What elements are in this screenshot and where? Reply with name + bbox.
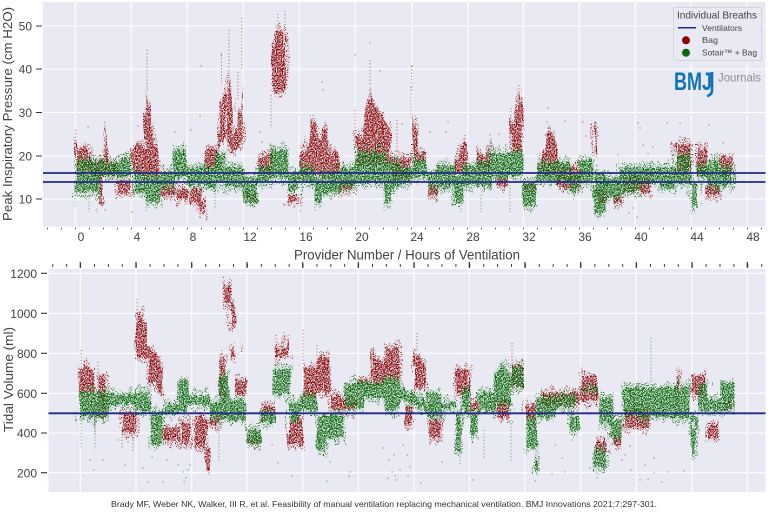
scatter: bag, volume — [80, 279, 732, 481]
panel: peak inspiratory pressure chart — [0, 2, 766, 244]
y axis tick labels — [19, 20, 32, 206]
x axis tick labels: 32 — [522, 230, 536, 244]
x axis tick labels: 20 — [355, 230, 369, 244]
legend — [674, 8, 762, 60]
ventilator pressure lines — [43, 173, 766, 182]
shared x axis title: Provider Number / Hours of Ventilation — [294, 248, 520, 262]
x axis tick labels: 44 — [690, 230, 704, 244]
y axis tick labels: 20 — [19, 150, 32, 164]
y axis tick labels — [10, 267, 37, 480]
x axis tick labels: 28 — [466, 230, 480, 244]
scatter: sotair plus bag, volume — [80, 338, 733, 483]
x axis tick labels: 48 — [746, 230, 760, 244]
y axis title: Tidal Volume (ml) — [1, 327, 16, 432]
plot background — [43, 2, 766, 226]
y axis title: Peak Inspiratory Pressure (cm H2O) — [0, 7, 15, 221]
x axis minor ticks — [47, 228, 765, 230]
plot background — [48, 269, 766, 492]
logo: BMJ Journals: Journals — [718, 70, 761, 84]
logo: BMJ Journals — [674, 68, 761, 96]
x axis tick labels: 12 — [243, 230, 257, 244]
legend: sotair plus bag: Sotair™ + Bag — [702, 48, 757, 58]
y axis ticks — [36, 26, 42, 199]
y axis tick labels: 40 — [19, 62, 32, 76]
ventilator tidal volume line — [48, 412, 766, 414]
y axis tick labels: 600 — [17, 387, 37, 401]
y axis tick labels: 10 — [19, 192, 32, 206]
x axis tick labels: 4 — [134, 230, 141, 244]
x axis tick labels: 40 — [634, 230, 648, 244]
scatter: bag, pressure — [75, 11, 733, 217]
x axis tick labels: 24 — [410, 230, 424, 244]
y axis tick labels: 1000 — [10, 307, 37, 321]
legend: Individual Breaths — [677, 10, 757, 22]
y axis tick labels: 400 — [17, 426, 37, 440]
scatter: sotair plus bag, pressure — [75, 146, 733, 217]
legend: ventilators: Ventilators — [702, 23, 742, 33]
citation: Brady MF, Weber NK, Walker, III R, et al. Feasibility of manual ventilation replacing mechanical ventilation. BMJ Innovations 2021;7:297-301. — [111, 500, 657, 509]
y axis tick labels: 800 — [17, 347, 37, 361]
panel: tidal volume chart — [1, 267, 766, 492]
y axis tick labels: 50 — [19, 20, 32, 34]
y axis tick labels: 1200 — [10, 267, 37, 281]
x axis tick labels: 0 — [78, 230, 85, 244]
logo: BMJ Journals: BMJ — [674, 68, 712, 96]
top axis ticks of tidal volume chart — [52, 264, 765, 267]
y axis ticks — [41, 273, 47, 473]
x axis tick labels: 36 — [578, 230, 592, 244]
y axis tick labels: 30 — [19, 106, 32, 120]
x axis tick labels — [78, 230, 760, 244]
x axis tick labels: 8 — [190, 230, 197, 244]
legend: bag: Bag — [702, 35, 718, 45]
y axis tick labels: 200 — [17, 466, 37, 480]
x axis tick labels: 16 — [299, 230, 313, 244]
